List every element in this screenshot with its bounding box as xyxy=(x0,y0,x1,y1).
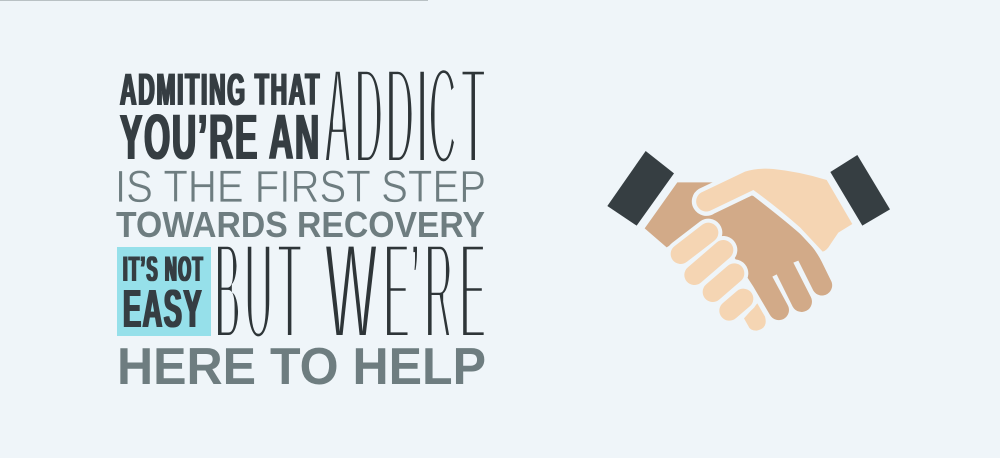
heading: admiting that you're an xyxy=(120,64,321,173)
heading: but we're in thin tall letters: W xyxy=(325,213,377,369)
headline text block xyxy=(115,37,486,396)
heading: but we're in thin tall letters: BUT xyxy=(215,212,301,369)
left hand, tan xyxy=(645,182,832,320)
right cuff xyxy=(830,155,890,226)
heading: but we're in thin tall letters xyxy=(215,212,485,369)
line: is the first step: IS THE FIRST STEP xyxy=(115,161,486,212)
line: here to help: HERE TO HELP xyxy=(117,338,486,396)
callout box: it's not easy: EASY xyxy=(123,279,203,339)
heading: admiting that you're an: YOU’RE AN xyxy=(120,101,321,173)
heading: admiting that you're an: ADMITING THAT xyxy=(120,64,321,115)
callout box: it's not easy: IT’S NOT xyxy=(123,250,204,289)
left cuff xyxy=(607,151,674,226)
heading: addict in thin tall letters: ADDICT xyxy=(325,37,485,194)
callout box: it's not easy xyxy=(117,247,211,339)
line: towards recovery: TOWARDS RECOVERY xyxy=(116,204,485,245)
heading: but we're in thin tall letters: E’RE xyxy=(384,212,485,369)
right hand, light xyxy=(696,169,852,252)
fingers wrapping the hand xyxy=(681,233,766,331)
icon: handshake xyxy=(607,151,890,331)
